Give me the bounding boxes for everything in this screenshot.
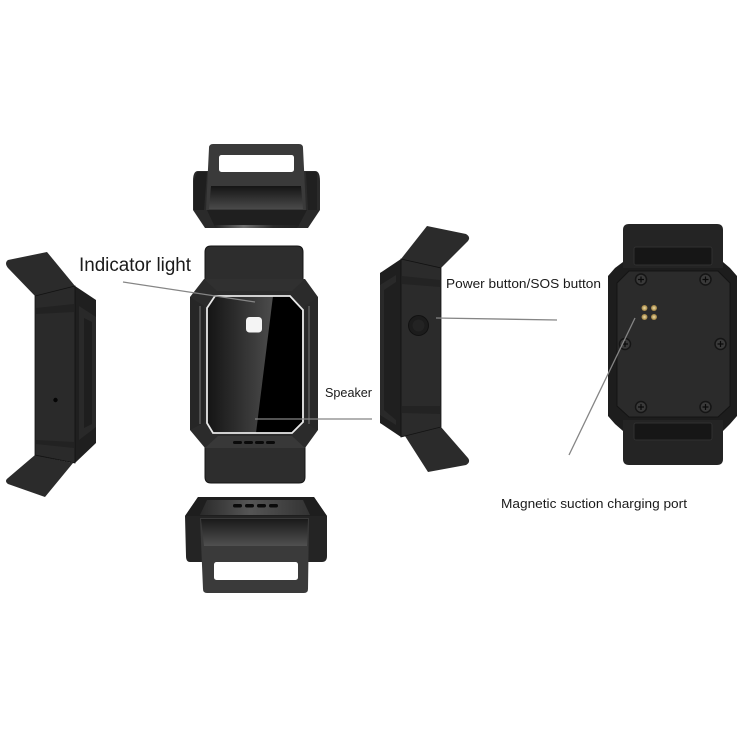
strap window [219,155,294,172]
case body [190,279,318,448]
bottom strap [623,420,723,465]
speaker holes [233,441,275,444]
bottom strap [205,445,305,483]
label: power button: Power button/SOS button [446,276,601,291]
strap window [214,562,298,580]
speaker holes on edge [233,504,278,508]
lower flap [6,455,73,497]
indicator light [246,317,262,332]
top strap [205,246,303,282]
bottom view of watch [185,497,327,593]
strap recesses [634,247,712,265]
label: charging port: Magnetic suction charging port [501,496,687,511]
back plate [617,271,730,417]
leader line: indicator light [123,282,255,302]
case [608,262,737,431]
leader line: charging port [569,318,635,455]
label: speaker: Speaker [325,385,373,400]
leader line: speaker [255,418,372,420]
label: indicator light: Indicator light [79,255,192,276]
screws [620,274,726,412]
right side view of watch [380,226,469,472]
front view of watch [190,246,318,483]
lower flap [405,427,469,472]
left side view of watch [6,252,96,497]
upper flap [401,226,469,268]
power button [408,316,428,336]
leader line: power button [436,318,557,320]
top strap [623,224,723,268]
back view of watch [608,224,737,465]
screen [207,296,302,433]
upper flap [6,252,75,296]
top view of watch [193,144,320,228]
charging pins [642,305,657,320]
side hole [53,398,58,402]
